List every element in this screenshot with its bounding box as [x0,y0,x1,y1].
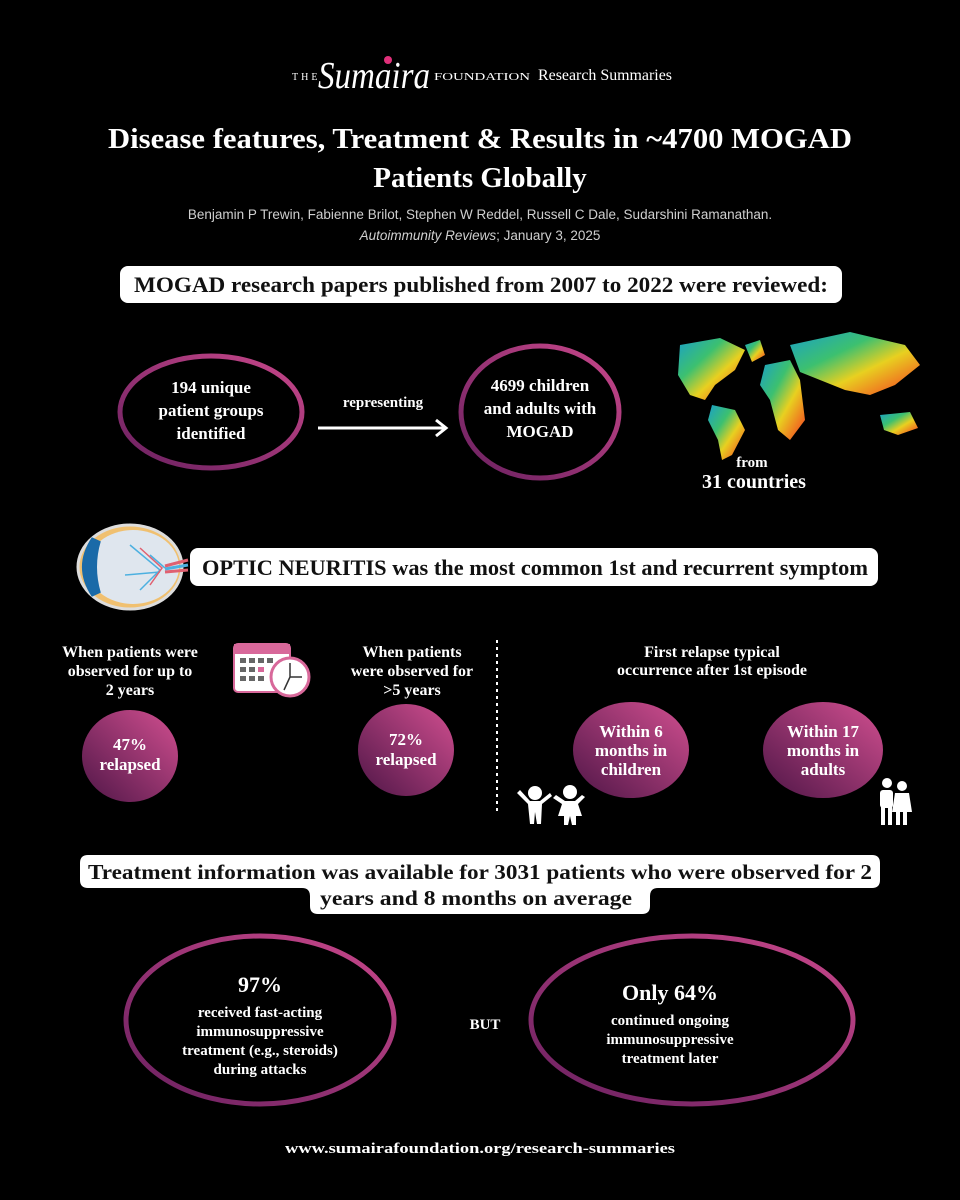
world map: from [736,455,768,471]
world map [678,332,920,493]
ellipse: 97% fast-acting: immunosuppressive [196,1024,324,1040]
ellipse: only 64%: Only 64% [622,980,718,1005]
text: >5 years: were observed for [351,663,473,680]
text: first relapse: occurrence after 1st episode [617,662,807,679]
ellipse: children and adults: and adults with [484,399,597,418]
authors citation [188,207,772,243]
ellipse: only 64%: immunosuppressive [606,1032,734,1048]
ellipse: children and adults: MOGAD [506,422,574,441]
heading box: optic neuritis [190,548,878,586]
logo header: Sumaira [318,55,430,97]
authors citation: Autoimmunity Reviews; January 3, 2025 [359,228,600,243]
logo header: Research Summaries [538,67,672,84]
circle: 72% relapsed: relapsed [375,750,437,769]
logo header: FOUNDATION [434,72,530,83]
ellipse: 97% fast-acting [126,936,394,1104]
arrow: representing: representing [343,395,424,411]
text: up to 2 years [62,644,198,699]
ellipse: patient groups [120,356,302,468]
text: up to 2 years: When patients were [62,644,198,661]
title: Patients Globally [373,162,587,194]
icon: eye [78,525,188,609]
text: >5 years: When patients [362,644,462,661]
heading box: papers reviewed: MOGAD research papers published from 2007 to 2022 were reviewed: [134,272,828,297]
text: BUT: BUT [470,1017,500,1033]
ellipse: children and adults [461,346,619,478]
text: up to 2 years: 2 years [106,682,154,699]
title [108,123,852,194]
heading box: treatment information: Treatment information was available for 3031 patients who were observed for 2 [88,860,872,884]
circle: within 6 months children [573,702,689,798]
heading box: treatment information [80,855,880,914]
icon: children [517,785,585,825]
heading box: optic neuritis: OPTIC NEURITIS was the most common 1st and recurrent symptom [202,555,868,580]
circle: within 17 months adults [763,702,883,798]
circle: within 17 months adults: Within 17 [787,722,859,741]
footer url: www.sumairafoundation.org/research-summaries [285,1141,675,1157]
ellipse: only 64% [531,936,853,1104]
icon: calendar clock [234,644,309,696]
ellipse: patient groups: 194 unique [171,378,251,397]
circle: 72% relapsed [358,704,454,796]
logo header: THE [292,72,320,83]
title: Disease features, Treatment & Results in ~4700 MOGAD [108,123,852,155]
arrow: representing [318,395,446,436]
circle: 47% relapsed: 47% [113,735,147,754]
circle: within 6 months children: months in [595,741,668,760]
logo header [292,55,672,97]
ellipse: 97% fast-acting: during attacks [214,1062,307,1078]
circle: within 17 months adults: adults [801,760,846,779]
circle: 72% relapsed: 72% [389,730,423,749]
heading box: treatment information: years and 8 months on average [320,886,632,910]
circle: within 6 months children: children [601,760,662,779]
ellipse: patient groups: identified [177,424,246,443]
text: first relapse [617,644,807,679]
ellipse: only 64%: treatment later [622,1051,719,1067]
ellipse: only 64%: continued ongoing [611,1013,729,1029]
ellipse: patient groups: patient groups [158,401,264,420]
text: >5 years: >5 years [383,682,441,699]
heading box: papers reviewed [120,266,842,303]
circle: 47% relapsed [82,710,178,802]
circle: within 6 months children: Within 6 [599,722,663,741]
ellipse: 97% fast-acting: 97% [238,972,282,997]
circle: 47% relapsed: relapsed [99,755,161,774]
icon: elderly couple [880,778,912,825]
ellipse: 97% fast-acting: treatment (e.g., steroids) [182,1043,338,1059]
text: first relapse: First relapse typical [644,644,780,661]
ellipse: children and adults: 4699 children [491,376,590,395]
circle: within 17 months adults: months in [787,741,860,760]
text: up to 2 years: observed for up to [68,663,192,680]
ellipse: 97% fast-acting: received fast-acting [198,1005,323,1021]
world map: 31 countries [702,471,806,493]
authors citation: Benjamin P Trewin, Fabienne Brilot, Stephen W Reddel, Russell C Dale, Sudarshini Ramanathan. [188,207,772,222]
text: >5 years [351,644,473,699]
